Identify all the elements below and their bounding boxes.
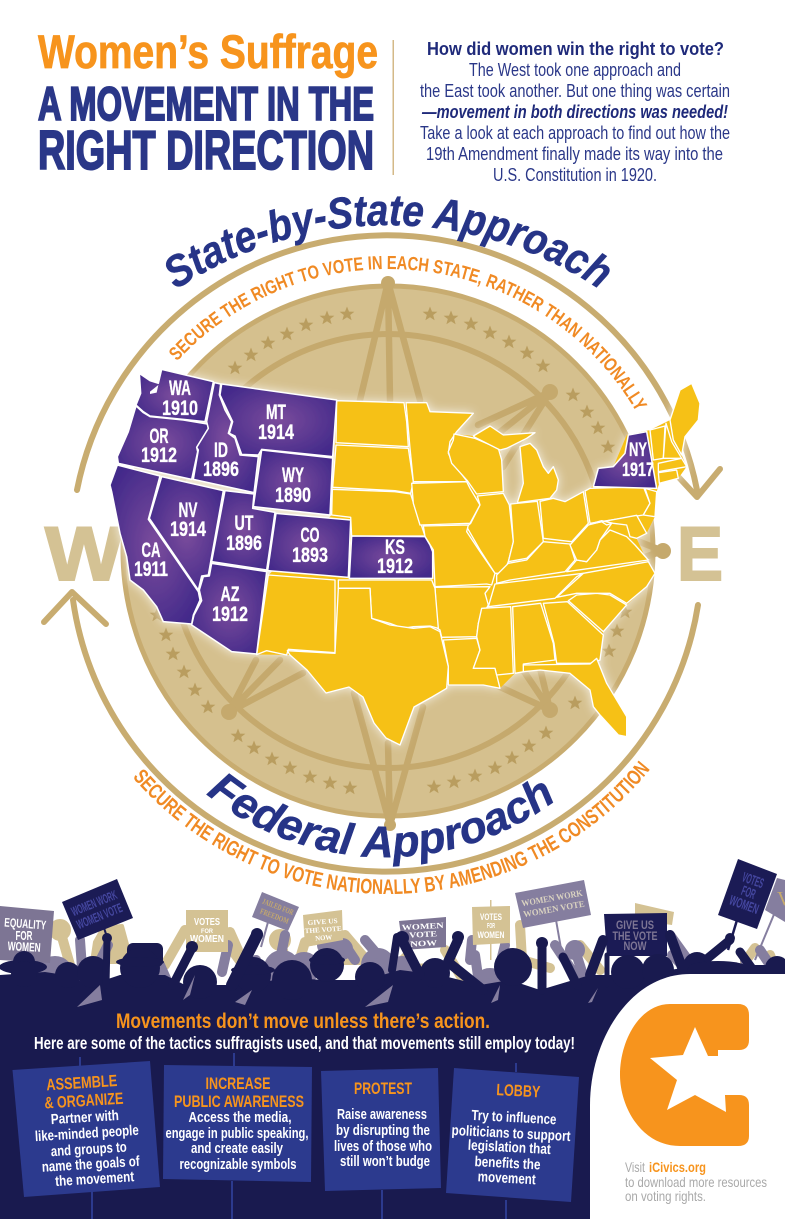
sign: women vote now: WOMEN (401, 921, 444, 932)
compass: disc (123, 276, 671, 831)
sign: women vote now: VOTE (409, 929, 437, 940)
state labels: KS (385, 536, 405, 559)
state labels: WY (282, 464, 304, 487)
footer call to action: iCivics.org (649, 1159, 706, 1175)
sign: give us the vote now, tan: THE VOTE (304, 925, 342, 935)
state labels: UT (234, 512, 254, 535)
compass: stars (150, 306, 632, 794)
sign: equality for women (0, 906, 54, 963)
tactic sign: protest: lives of those who (334, 1139, 432, 1155)
tactic sign: increase public awareness: recognizable symbols (180, 1157, 296, 1173)
sign: votes for women, tan: FOR (201, 928, 213, 935)
tactic sign: increase public awareness: engage in public speaking, (166, 1126, 308, 1142)
state labels: 1917 (622, 460, 654, 481)
tactic sign: assemble and organize: and groups to (50, 1140, 127, 1160)
crowd: lavender middle figures (41, 935, 770, 997)
title: a movement in the: A MOVEMENT IN THE (38, 77, 374, 130)
sign: jailed for freedom: JAILED FOR (261, 897, 295, 917)
tactic sign: assemble and organize: the movement (55, 1169, 135, 1190)
crowd: tan background figures (54, 924, 775, 978)
sign: votes for women, tan (472, 900, 510, 960)
footer call to action: Visit (625, 1159, 645, 1175)
state labels: WA (169, 377, 191, 400)
sign: jailed for freedom: FREEDOM (259, 907, 290, 926)
tactic sign: lobby: politicians to support (451, 1123, 571, 1145)
crowd: lavender accents between figures (77, 975, 598, 1007)
state labels: CO (300, 524, 320, 547)
title: Women's Suffrage: Women’s Suffrage (38, 25, 378, 78)
sign: equality for women: EQUALITY (4, 916, 47, 932)
state labels: OR (150, 425, 168, 448)
tactic sign: lobby: Try to influence (471, 1108, 557, 1128)
sign: equality for women: WOMEN (7, 939, 41, 955)
intro text block (420, 38, 730, 185)
purple states: won the vote before 1920 (110, 369, 657, 654)
sign: women work women vote, grey (515, 880, 591, 960)
tactic sign: increase public awareness (163, 1053, 312, 1219)
compass letter W: W (45, 512, 123, 597)
footer call to action: on voting rights. (625, 1188, 706, 1204)
sign: women work women vote, grey: WOMEN WORK (521, 888, 583, 908)
tactic sign: protest: still won’t budge (340, 1154, 430, 1170)
intro text block: U.S. Constitution in 1920. (493, 164, 657, 185)
state labels: 1914 (170, 518, 206, 541)
crowd: navy foreground silhouettes (0, 928, 785, 1219)
tactic sign: protest: PROTEST (354, 1080, 412, 1098)
tactic sign: assemble and organize: Partner with (50, 1108, 119, 1128)
title: right direction: RIGHT DIRECTION (38, 119, 374, 181)
state labels: CA (142, 539, 160, 562)
sign: votes for women, dark (718, 859, 777, 950)
sign: cropped grey placard (755, 878, 785, 960)
map of the United States (110, 369, 700, 745)
tactic sign: assemble and organize: name the goals of (41, 1154, 140, 1176)
state labels: 1912 (212, 603, 248, 626)
tactic sign: assemble and organize: ASSEMBLE (46, 1072, 118, 1094)
sign: give us the vote now, tan (303, 910, 343, 947)
sign: women work women vote, dark: WOMEN WORK (69, 887, 120, 919)
state labels: 1896 (226, 532, 262, 555)
sign: jailed for freedom (252, 892, 299, 947)
state labels: 1890 (275, 484, 311, 507)
tactic sign: lobby: movement (477, 1169, 536, 1188)
state labels: 1893 (292, 544, 328, 567)
sign: give us the vote now, dark: NOW (624, 941, 647, 953)
iCivics white corner panel (590, 974, 785, 1219)
tactic sign: increase public awareness: INCREASE (206, 1075, 270, 1093)
tactic sign: assemble and organize (12, 1057, 160, 1219)
state labels: AZ (220, 583, 240, 606)
protest crowd (0, 859, 785, 1219)
tactic sign: lobby (446, 1063, 579, 1219)
tactic sign: assemble and organize: & ORGANIZE (44, 1090, 124, 1112)
subheading: federal goal: SECURE THE RIGHT TO VOTE NATIONALLY BY AMENDING THE CONSTITUTION (134, 760, 650, 894)
title block (38, 25, 378, 181)
sign: votes for women, tan: WOMEN (190, 934, 224, 945)
sign: votes for women, tan: WOMEN (478, 930, 504, 940)
sign: equality for women: FOR (16, 929, 32, 943)
sign: women vote now: NOW (410, 938, 437, 949)
intro text block: The West took one approach and (469, 59, 681, 80)
iCivics logo (620, 1004, 749, 1146)
tactic sign: protest: by disrupting the (336, 1123, 430, 1139)
tactic sign: increase public awareness: Access the media, (188, 1110, 292, 1126)
sign: give us the vote now, tan: GIVE US (307, 917, 338, 927)
state labels: 1912 (141, 444, 177, 467)
sign: votes for women, dark: FOR (739, 882, 758, 902)
sign: give us the vote now, dark (604, 903, 674, 956)
state labels: NY (629, 440, 647, 461)
tactic sign: increase public awareness: PUBLIC AWARENESS (174, 1093, 304, 1111)
heading: movements don't move: Movements don’t move unless there’s action. (116, 1009, 490, 1033)
state labels: MT (266, 401, 286, 424)
sign: votes for women, tan: FOR (487, 923, 495, 930)
state labels: 1914 (258, 421, 294, 444)
state labels: NV (178, 499, 198, 522)
state labels (134, 377, 654, 626)
sign: votes for women, tan: VOTES (194, 917, 220, 928)
sign: give us the vote now, tan: NOW (315, 933, 332, 943)
sign: women work women vote, dark: WOMEN VOTE (74, 900, 125, 932)
sign: women work women vote, grey: WOMEN VOTE (522, 899, 585, 919)
yellow states: no statewide suffrage before 1920 (257, 383, 700, 745)
sign: votes for women, tan (186, 910, 228, 952)
state labels: ID (214, 439, 228, 462)
intro text block: How did women win the right to vote? (427, 38, 724, 59)
state labels: 1896 (203, 458, 239, 481)
state labels: 1911 (134, 558, 168, 581)
tactic sign: increase public awareness: and create easily (191, 1141, 283, 1157)
state labels: 1912 (377, 555, 413, 578)
sign: votes for women, tan: VOTES (480, 912, 502, 922)
tactic sign: protest: Raise awareness (337, 1107, 427, 1123)
compass letter E: E (677, 512, 723, 597)
sign: women work women vote, dark (62, 879, 133, 940)
tactic sign: lobby: benefits the (474, 1154, 541, 1174)
subheading: state-by-state goal: SECURE THE RIGHT TO VOTE IN EACH STATE, RATHER THAN NATIONALLY (169, 256, 648, 409)
tactic sign: lobby: LOBBY (496, 1081, 541, 1101)
footer call to action (625, 1159, 767, 1204)
heading: state-by-state approach: State-by-State Approach (166, 196, 610, 288)
tactic sign: protest (321, 1068, 441, 1219)
tactic sign: lobby: legislation that (467, 1138, 551, 1158)
sign: women vote now (399, 917, 446, 950)
tactic sign: assemble and organize: like-minded people (34, 1123, 139, 1145)
sign: give us the vote now, dark: THE VOTE (612, 931, 658, 943)
sign: votes for women, dark: WOMEN (727, 892, 761, 917)
heading: federal approach: Federal Approach (206, 773, 554, 867)
subheading: tactics intro: Here are some of the tactics suffragists used, and that movements still employ today! (34, 1033, 575, 1053)
sign: give us the vote now, dark: GIVE US (616, 920, 654, 932)
state labels: 1910 (162, 397, 198, 420)
compass: outer direction arcs with arrows (44, 235, 720, 872)
